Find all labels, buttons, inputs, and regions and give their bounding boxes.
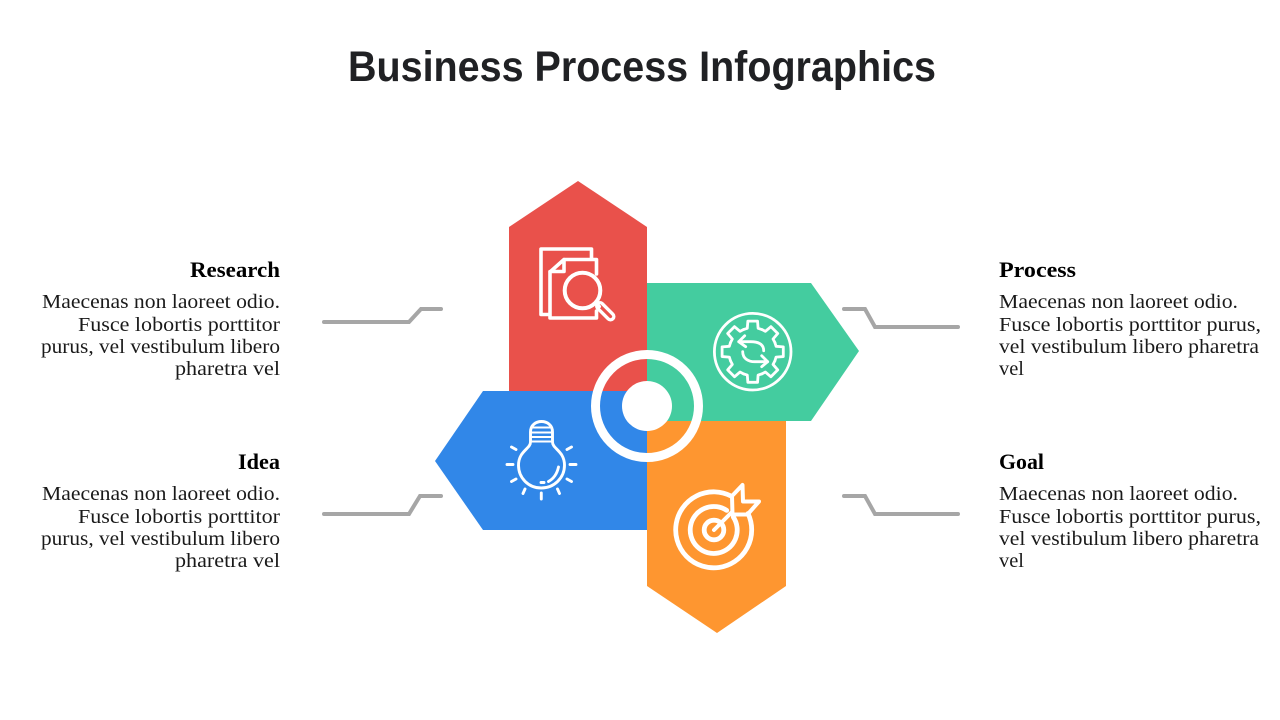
text block: idea <box>41 449 280 572</box>
title: Business Process Infographics <box>348 43 936 91</box>
text block: idea: pharetra vel <box>175 550 280 572</box>
text block: research: Research <box>190 257 280 282</box>
panel: research arrow <box>509 181 647 392</box>
text block: idea: Maecenas non laoreet odio. <box>42 483 280 505</box>
connector: process <box>844 309 958 327</box>
text block: research: purus, vel vestibulum libero <box>41 336 280 358</box>
text block: process: vel <box>999 358 1024 380</box>
connector: research <box>324 309 441 322</box>
text block: process: Maecenas non laoreet odio. <box>999 291 1238 313</box>
icon: light bulb <box>507 422 576 499</box>
text block: idea: Fusce lobortis porttitor <box>78 506 280 528</box>
text block: process: Fusce lobortis porttitor purus, <box>999 314 1261 336</box>
text block: research: Maecenas non laoreet odio. <box>42 291 280 313</box>
text block: goal <box>999 449 1261 572</box>
text block: goal: Maecenas non laoreet odio. <box>999 483 1238 505</box>
icon: gear with cycle arrows <box>714 313 791 390</box>
panel: goal arrow <box>647 421 786 633</box>
text block: goal: vel <box>999 550 1024 572</box>
panel: idea arrow <box>435 391 647 530</box>
text block: research: pharetra vel <box>175 358 280 380</box>
text block: process <box>999 257 1261 380</box>
text block: idea: purus, vel vestibulum libero <box>41 528 280 550</box>
connector: idea <box>324 496 441 514</box>
text block: goal: Goal <box>999 449 1044 474</box>
connector: goal <box>844 496 958 514</box>
icon: documents with magnifier <box>541 249 610 318</box>
text block: goal: vel vestibulum libero pharetra <box>999 528 1259 550</box>
text block: process: vel vestibulum libero pharetra <box>999 336 1259 358</box>
text block: process: Process <box>999 257 1076 282</box>
text block: idea: Idea <box>238 449 280 474</box>
center ring <box>596 354 698 458</box>
text block: research: Fusce lobortis porttitor <box>78 314 280 336</box>
text block: goal: Fusce lobortis porttitor purus, <box>999 506 1261 528</box>
panel: process arrow <box>647 283 859 421</box>
icon: target with arrow <box>676 485 759 568</box>
text block: research <box>41 257 280 380</box>
